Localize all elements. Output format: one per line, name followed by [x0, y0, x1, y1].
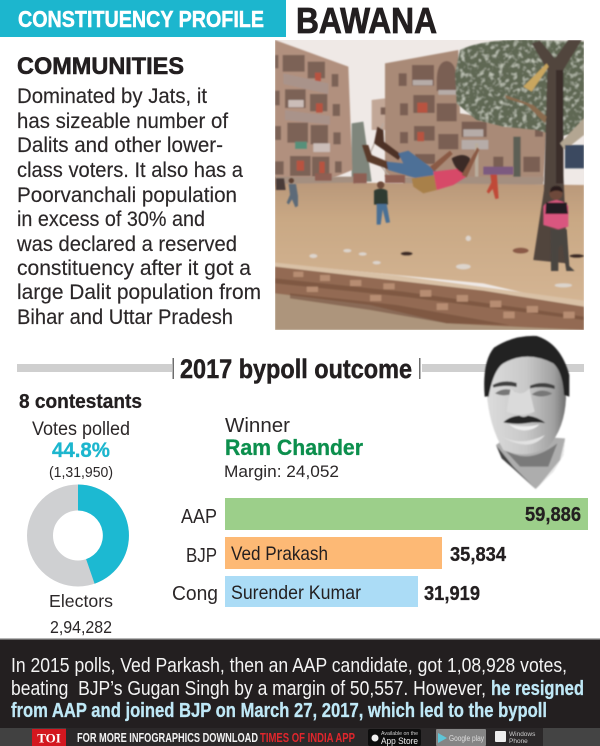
stat: electors: 2,94,282 — [50, 617, 112, 637]
bar: BJP: BJP — [186, 545, 217, 567]
text block: communities description: class voters. It also has a — [17, 159, 243, 182]
stat: votes polled: Votes polled — [32, 419, 130, 440]
text block: communities description: was declared a reserved — [16, 233, 237, 256]
photo: bystanders — [276, 167, 575, 271]
bar: Congress: Cong — [172, 583, 218, 605]
bar: BJP — [186, 537, 507, 569]
winner details: Ram Chander — [225, 435, 363, 460]
photo: ground and brick wall — [275, 177, 584, 330]
footer bar: Times of India app promotion: FOR MORE INFOGRAPHICS DOWNLOAD — [77, 731, 258, 745]
note panel: background of the bypoll — [0, 638, 600, 728]
stat: votes polled — [32, 419, 130, 481]
badge: App Store: Available on the — [381, 731, 418, 737]
stat: 8 contestants: 8 contestants — [19, 391, 142, 413]
bar: BJP: Ved Prakash — [231, 543, 328, 565]
badge: App Store — [368, 729, 421, 746]
winner details — [224, 415, 363, 481]
bar: BJP: 35,834 — [450, 544, 507, 566]
stat: votes polled: 44.8% — [52, 439, 110, 462]
text block: communities description: Poorvanchali population — [17, 184, 237, 207]
stat: votes polled: (1,31,950) — [49, 465, 113, 481]
bar: Congress: Surender Kumar — [231, 582, 361, 604]
bar: Congress — [172, 576, 480, 607]
text block: communities description: Dalits and other lower- — [17, 134, 223, 157]
header: constituency profile — [0, 0, 286, 37]
stat: electors: Electors — [49, 591, 113, 611]
header: constituency profile: CONSTITUENCY PROFILE — [18, 6, 264, 32]
bar: Congress: 31,919 — [424, 583, 480, 605]
donut chart: turnout 44.8 percent — [40, 484, 129, 584]
photo: child on swing — [362, 123, 479, 193]
text block: communities description: Bihar and Uttar Pradesh — [17, 306, 233, 329]
footer bar: Times of India app promotion — [0, 728, 600, 746]
logo: TOI — [32, 729, 66, 746]
bar: AAP — [181, 498, 588, 530]
note panel: background of the bypoll: beating BJP’s Gugan Singh by a margin of 50,557. However, — [11, 677, 486, 700]
photo: tree — [455, 40, 584, 263]
badge: Windows Phone — [495, 731, 536, 745]
text block: communities description — [16, 85, 261, 329]
photo: children on a swing outside apartment blocks — [275, 40, 584, 330]
text block: communities description: in excess of 30% and — [17, 208, 205, 231]
portrait: Ram Chander — [484, 336, 569, 489]
logo: TOI: TOI — [37, 730, 61, 746]
text block: communities description: Dominated by Jats, it — [17, 85, 207, 108]
text block: communities description: large Dalit population from — [17, 281, 261, 304]
winner details: Margin: 24,052 — [224, 462, 339, 481]
text block: communities description: constituency after it got a — [17, 257, 251, 280]
badge: Windows Phone: Windows — [509, 731, 536, 738]
heading: communities: COMMUNITIES — [17, 53, 184, 80]
section header: 2017 bypoll outcome — [17, 354, 584, 384]
badge: Google Play: Google play — [449, 734, 484, 743]
bar: AAP: 59,886 — [525, 504, 581, 526]
title: Bawana: BAWANA — [296, 0, 437, 41]
text block: communities description: has sizeable number of — [17, 110, 228, 133]
badge: Windows Phone: Phone — [509, 738, 528, 745]
footer bar: Times of India app promotion: TIMES OF INDIA APP — [260, 731, 355, 745]
badge: Google Play — [436, 729, 486, 746]
stat: electors — [49, 591, 113, 637]
bar chart: results by party — [172, 498, 588, 607]
section header: 2017 bypoll outcome: 2017 bypoll outcome — [180, 354, 412, 384]
winner details: Winner — [225, 415, 290, 437]
bar: AAP: AAP — [181, 506, 217, 528]
